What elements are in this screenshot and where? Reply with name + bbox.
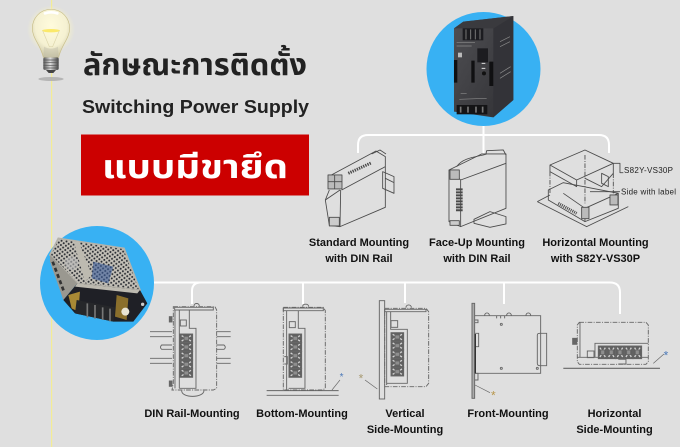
product: din rail power supply [454,16,513,117]
icon: tan asterisk: * [359,372,364,386]
caption: standard mounting: Standard Mounting [309,237,409,249]
caption: horizontal mounting: Horizontal Mounting [542,237,649,249]
caption: standard mounting: with DIN Rail [324,253,393,265]
top product circle [426,12,540,126]
line drawing: face-up mounting [449,150,506,227]
caption: face-up mounting: with DIN Rail [442,253,511,265]
icon: light bulb [27,5,75,81]
line drawing: horizontal mounting with bracket [537,150,628,227]
icon: orange asterisk: * [491,388,496,402]
label: S82Y-VS30P: S82Y-VS30P [624,166,673,175]
caption: horizontal side-mounting: Side-Mounting [576,424,653,436]
caption: vertical side-mounting: Side-Mounting [367,424,443,436]
line drawing: standard mounting [325,150,394,227]
caption: bottom-mounting: Bottom-Mounting [256,408,348,420]
label: side with label: Side with label [621,188,676,196]
bottom connector lines [150,282,620,314]
line drawing: bottom mounting [267,304,344,395]
top connector lines [358,125,609,154]
caption: din rail-mounting: DIN Rail-Mounting [144,408,240,420]
icon: blue asterisk: * [340,372,344,383]
line drawing: vertical side-mounting [359,301,429,399]
line drawing: front-mounting [472,303,547,402]
line drawing: horizontal side-mounting [563,322,669,368]
icon: blue asterisk right: * [664,348,669,362]
left product circle [40,226,154,340]
line drawing: din rail mounting [150,303,231,396]
caption: front-mounting: Front-Mounting [467,408,549,420]
caption: vertical side-mounting: Vertical [385,408,425,420]
red banner: แบบมีขายึด [102,148,288,185]
caption: face-up mounting: Face-Up Mounting [429,237,525,249]
red banner [81,134,309,196]
title: ลักษณะการติดตั้ง [83,44,307,82]
product: enclosed mesh power supply [50,238,147,322]
caption: horizontal side-mounting: Horizontal [588,408,641,420]
yellow timeline line [51,0,52,447]
subtitle: Switching Power Supply [82,96,310,117]
caption: horizontal mounting: with S82Y-VS30P [550,253,640,265]
